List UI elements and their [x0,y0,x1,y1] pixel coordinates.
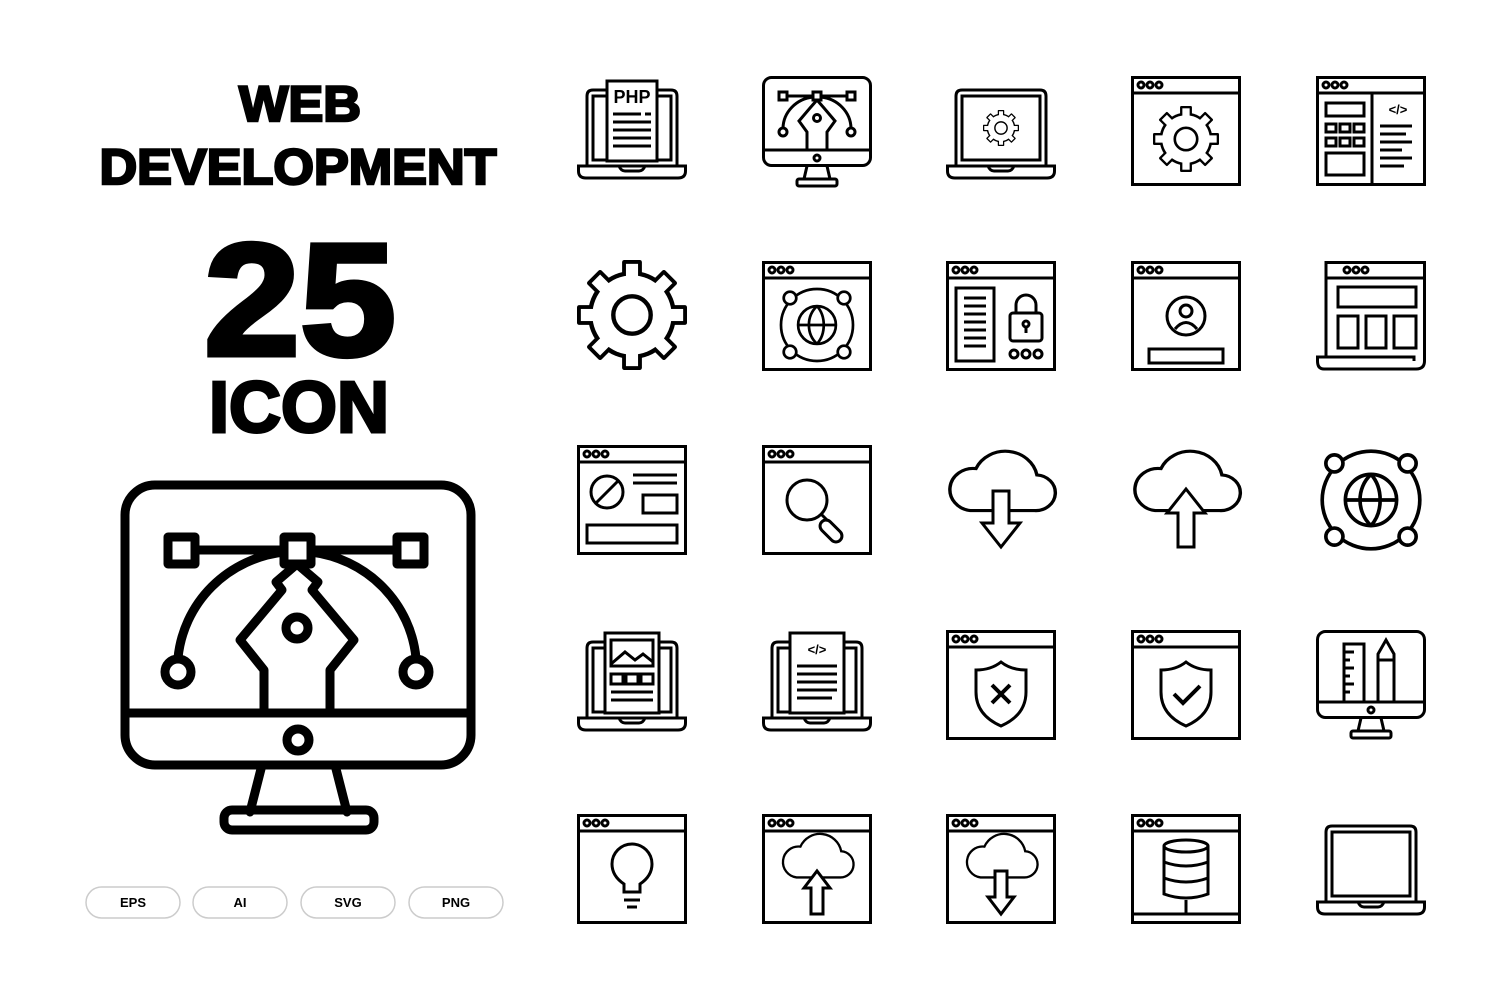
icon: laptop settings [948,90,1054,178]
icon: browser lock [948,262,1054,370]
hero icon: monitor with pen tool [125,485,471,830]
icon: browser globe [764,262,870,370]
format pills: SVG [334,895,362,910]
count: 25: 25 [204,210,396,389]
title: WEB [239,76,361,132]
icon: browser idea [578,816,686,922]
icon: php laptop: PHP [613,87,651,107]
title [100,76,497,195]
subtitle: ICON: ICON [209,368,389,448]
format pills [86,887,503,918]
icon: gear [577,260,687,370]
icon: browser code layout [1318,78,1424,184]
format pills: EPS [120,895,146,910]
icon: browser cloud download [948,816,1054,922]
icon: browser search [764,446,870,554]
icon: browser blocked [578,446,686,554]
icon: cloud upload [1135,451,1240,547]
icon: browser shield x [948,632,1054,738]
icon: laptop code: </> [808,642,827,657]
icon: browser cloud upload [764,816,870,922]
icon: globe network [1322,451,1420,549]
icon: laptop [1318,826,1424,914]
icon: browser code layout: </> [1389,102,1408,117]
icon: php laptop [578,81,686,178]
icon: laptop image [578,633,686,730]
format pills: PNG [442,895,470,910]
icon: browser database [1132,816,1240,922]
icon: cloud download [950,451,1055,547]
icon: layout page [1318,262,1424,369]
icon: browser user [1132,262,1240,370]
icon grid [577,78,1424,922]
title: DEVELOPMENT [100,139,497,195]
icon: monitor ruler pencil [1318,632,1424,738]
icon: monitor pen tool [764,78,870,186]
icon: browser shield check [1132,632,1240,738]
icon: laptop code [764,633,870,730]
format pills: AI [234,895,246,910]
icon: browser settings [1132,78,1240,184]
